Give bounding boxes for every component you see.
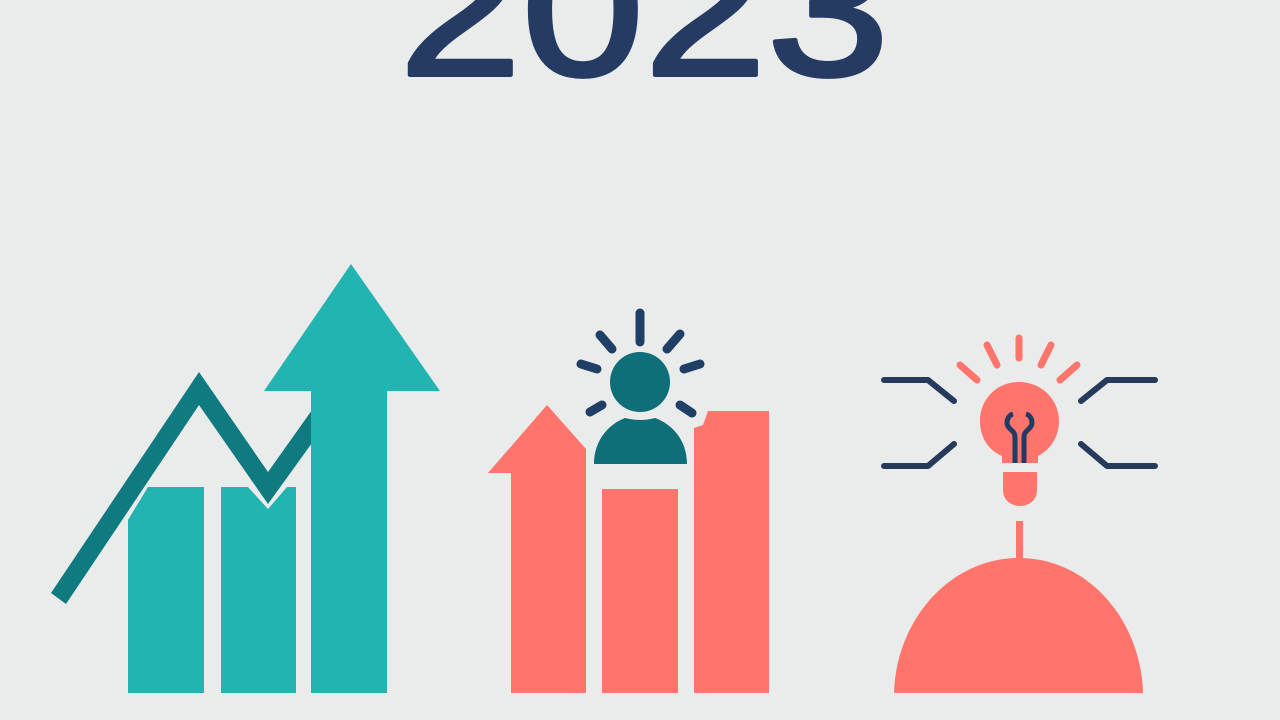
arrow: coral up bbox=[488, 405, 586, 693]
dome bbox=[894, 558, 1143, 693]
circuit connectors bbox=[884, 380, 1155, 466]
trend line bbox=[51, 372, 312, 604]
person body bbox=[594, 418, 687, 464]
icon: coral bars with person bbox=[488, 313, 769, 693]
filament bbox=[1007, 414, 1032, 463]
person head bbox=[610, 352, 670, 412]
icon: lightbulb on dome bbox=[884, 338, 1155, 693]
icon: teal growth chart with arrow bbox=[51, 264, 440, 693]
stem bbox=[1016, 521, 1023, 561]
bulb rays bbox=[960, 338, 1077, 380]
arrow: teal up bbox=[264, 264, 440, 693]
bar: coral right bbox=[694, 411, 769, 693]
bar: coral middle bbox=[602, 489, 678, 693]
bar: teal first bbox=[128, 487, 204, 693]
bulb base bbox=[1003, 472, 1037, 506]
bar: teal second bbox=[221, 487, 296, 693]
person rays bbox=[581, 313, 700, 413]
bulb glass bbox=[980, 382, 1059, 463]
